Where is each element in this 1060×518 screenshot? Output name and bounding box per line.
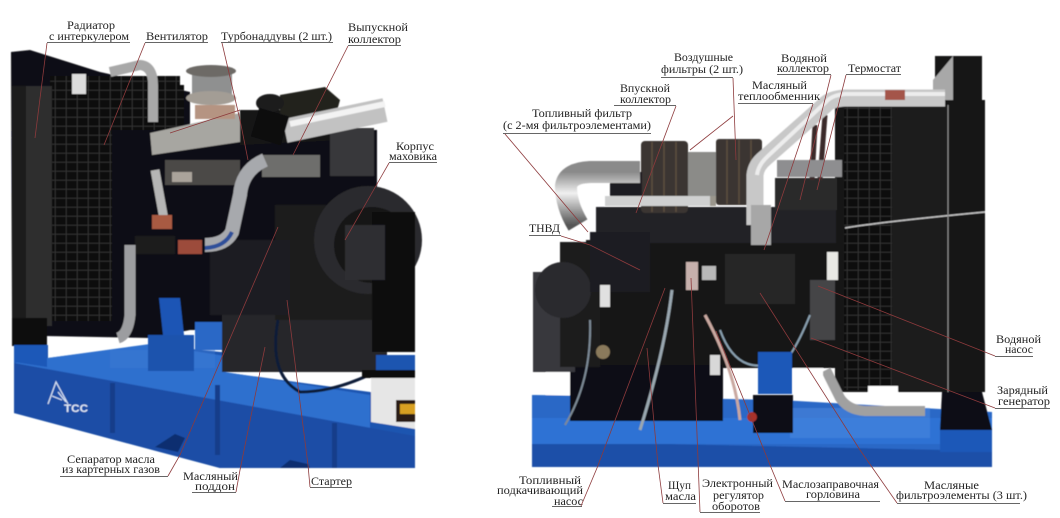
label: oil filter elements: фильтроэлементы (3 шт.) [896, 490, 1027, 502]
label: oil filter elements: Масляные [924, 480, 979, 492]
label: oil dipstick: масла [665, 491, 696, 503]
label: water pump: Водяной [996, 334, 1041, 346]
leader: water pump [818, 286, 995, 356]
label: fuel filter [503, 108, 651, 134]
label: fuel filter: Топливный фильтр [532, 108, 632, 120]
silver pipes [110, 65, 385, 392]
label: oil dipstick: Щуп [668, 480, 691, 492]
label: electronic speed governor [700, 478, 773, 513]
stand and mounts [148, 298, 415, 373]
label: fan: Вентилятор [146, 31, 208, 43]
label: starter: Стартер [311, 476, 352, 488]
battery [362, 370, 415, 429]
label: fuel priming pump: Топливный [519, 475, 581, 487]
label: crankcase oil separator: Сепаратор масла [67, 454, 155, 466]
leader: crankcase oil separator [168, 227, 278, 476]
leader: exhaust manifold [293, 46, 348, 155]
air filter and turbo [150, 65, 340, 155]
photo: engine left side view [11, 50, 422, 468]
generator [314, 186, 422, 352]
label: oil dipstick [663, 480, 696, 504]
label: electronic speed governor: оборотов [712, 501, 761, 513]
label: flywheel housing [389, 141, 437, 163]
leader: radiator [35, 43, 47, 138]
label: fuel filter: (с 2-мя фильтроэлементами) [503, 120, 651, 132]
label: air filters: Воздушные [674, 52, 733, 64]
leader: air filters [690, 78, 736, 160]
label: crankcase oil separator: из картерных газов [62, 464, 161, 476]
label: exhaust manifold: коллектор [348, 34, 401, 46]
label: flywheel housing: маховика [389, 151, 437, 163]
label: fuel priming pump [497, 475, 583, 508]
label: water manifold: коллектор [777, 63, 829, 75]
leader: water manifold [800, 75, 831, 200]
label: exhaust manifold: Выпускной [348, 22, 408, 34]
radiator [835, 56, 992, 430]
silver pipes [565, 90, 945, 430]
leader: oil filler neck [716, 331, 785, 501]
logo: TSS: ТСС [64, 403, 88, 415]
label: water manifold [777, 53, 831, 75]
stand and mount [710, 352, 793, 433]
label: thermostat: Термостат [848, 63, 901, 75]
label: water manifold: Водяной [781, 53, 827, 65]
label: air filters [661, 52, 743, 78]
engine block [112, 110, 387, 372]
blue frame base [14, 344, 415, 468]
label: flywheel housing: Корпус [396, 141, 434, 153]
label: oil heat exchanger: Масляный [752, 80, 807, 92]
label: air filters: фильтры (2 шт.) [661, 64, 743, 76]
label: radiator: с интеркулером [49, 31, 130, 43]
label: oil pan: поддон [195, 481, 235, 493]
label: intake manifold [614, 83, 676, 106]
leader: fan [104, 43, 145, 145]
label: water pump [995, 334, 1041, 356]
label: oil pan: Масляный [183, 471, 238, 483]
label: electronic speed governor: регулятор [713, 490, 764, 502]
label: charging generator [995, 385, 1050, 408]
leader: fuel priming pump [581, 288, 665, 506]
logo: TSS [48, 382, 88, 415]
leader: flywheel housing [345, 163, 389, 240]
label: water pump: насос [1005, 344, 1033, 356]
label: exhaust manifold [348, 22, 408, 46]
leader: oil dipstick [647, 348, 663, 503]
leader: turbochargers [170, 43, 248, 160]
leader: fuel filter [505, 134, 588, 232]
label: oil filler neck: Маслозаправочная [782, 479, 880, 491]
label: oil filler neck [782, 479, 880, 502]
label: charging generator: генератор [998, 396, 1050, 408]
label: oil filter elements [896, 480, 1027, 504]
blue frame [532, 395, 992, 467]
label: radiator [47, 20, 130, 43]
leader: oil heat exchanger [764, 104, 813, 250]
label: fuel priming pump: подкачивающий [497, 485, 583, 497]
leader: high pressure fuel pump [561, 236, 640, 270]
label: turbochargers: Турбонаддувы (2 шт.) [221, 31, 332, 43]
label: high pressure fuel pump: ТНВД [529, 223, 560, 235]
leader: charging generator [811, 338, 995, 408]
label: oil heat exchanger: теплообменник [738, 91, 820, 103]
label: electronic speed governor: Электронный [702, 478, 773, 490]
label: oil pan [183, 471, 238, 493]
label: intake manifold: коллектор [620, 94, 671, 106]
leader: oil filter elements [760, 293, 897, 503]
radiator [11, 50, 190, 367]
label: fuel priming pump: насос [554, 496, 583, 508]
leader: thermostat [817, 75, 846, 190]
label: radiator: Радиатор [67, 20, 115, 32]
label: crankcase oil separator [60, 454, 168, 476]
photo: engine right side view [532, 56, 992, 467]
label: charging generator: Зарядный [997, 385, 1048, 397]
leader: electronic speed governor [691, 278, 700, 512]
air filters [605, 139, 762, 213]
leader: oil pan [236, 347, 265, 492]
engine block [533, 115, 841, 421]
leader: starter [287, 300, 310, 487]
label: oil filler neck: горловина [806, 489, 860, 501]
leader: intake manifold [636, 106, 676, 213]
label: oil heat exchanger [738, 80, 820, 104]
white gaps [546, 368, 898, 400]
label: intake manifold: Впускной [620, 83, 670, 95]
